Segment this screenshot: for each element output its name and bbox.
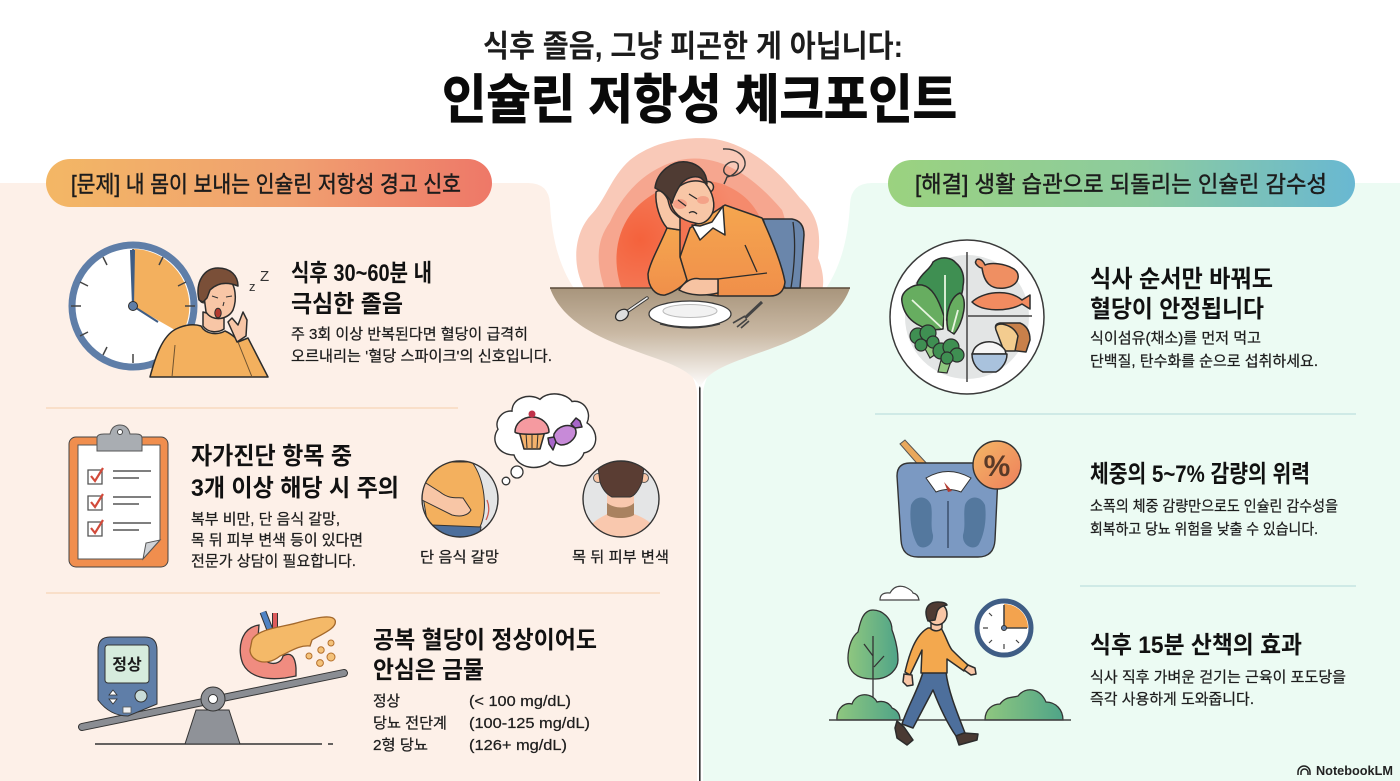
pancreas [240, 625, 296, 679]
title: 식후 졸음, 그냥 피곤한 게 아닙니다: [483, 29, 903, 64]
label: craving: 단 음식 갈망 [420, 549, 499, 566]
text: fasting glucose: 공복 혈당이 정상이어도 [373, 627, 597, 654]
NotebookLM watermark: NotebookLM [1316, 763, 1393, 778]
icon: glucose meter on seesaw with pancreas [82, 612, 344, 744]
icon: clipboard [69, 425, 168, 567]
heading pill: solution: [해결] 생활 습관으로 되돌리는 인슐린 감수성 [915, 171, 1327, 197]
solution 1: meal order [890, 240, 1318, 394]
text: weight loss: 체중의 5~7% 감량의 위력 [1090, 461, 1310, 488]
text: fasting glucose: 2형 당뇨 [373, 737, 428, 754]
text: self-check: 전문가 상담이 필요합니다. [191, 553, 356, 570]
icon: clock with yawning man: Z [260, 268, 269, 285]
heading pill: problem: [문제] 내 몸이 보내는 인슐린 저항성 경고 신호 [71, 171, 461, 197]
chair [763, 219, 804, 288]
heat aura [576, 138, 823, 290]
sweater [680, 205, 785, 296]
text: fasting glucose: (< 100 mg/dL) [469, 693, 571, 710]
text: fasting glucose: 당뇨 전단계 [373, 715, 447, 732]
text: drowsiness [291, 260, 552, 365]
icon: clock with yawning man [71, 245, 269, 377]
icon: walking man with clock and trees [829, 586, 1071, 745]
text: weight loss: 소폭의 체중 감량만으로도 인슐린 감수성을 [1090, 498, 1338, 515]
text: walking [1090, 632, 1346, 708]
icon: thought bubble with sweets [495, 394, 596, 485]
row 1: post-meal drowsiness [71, 245, 552, 377]
right panel background [703, 183, 1400, 781]
text: meal order: 단백질, 탄수화를 순으로 섭취하세요. [1090, 353, 1318, 370]
text: self-check: 목 뒤 피부 변색 등이 있다면 [191, 532, 363, 549]
icon: scale with percent badge: % [984, 450, 1010, 483]
heading pill: solution [888, 160, 1355, 207]
table [550, 288, 850, 388]
left panel background [0, 183, 697, 781]
plate [649, 301, 731, 328]
heading pill: problem [46, 159, 492, 207]
text: fasting glucose [373, 627, 597, 754]
icon: glucose meter on seesaw with pancreas: 정상 [112, 656, 142, 674]
ear [702, 182, 714, 192]
row 2: self-check [69, 394, 669, 570]
text: fasting glucose: 안심은 금물 [373, 657, 484, 684]
text: meal order: 식사 순서만 바꿔도 [1090, 266, 1273, 293]
text: self-check [191, 443, 399, 570]
text: walking: 즉각 사용하게 도와줍니다. [1090, 691, 1254, 708]
text: weight loss [1090, 461, 1338, 538]
text: meal order: 식이섬유(채소)를 먼저 먹고 [1090, 330, 1261, 347]
text: drowsiness: 식후 30~60분 내 [291, 260, 432, 287]
row 3: fasting glucose [82, 612, 597, 754]
text: fasting glucose: 정상 [373, 693, 400, 710]
text: walking: 식후 15분 산책의 효과 [1090, 632, 1302, 659]
dizzy spiral [723, 149, 745, 184]
icon: belly circle [418, 461, 498, 545]
icon: scale with percent badge [897, 440, 1021, 557]
title [442, 29, 957, 130]
solution 2: weight loss [897, 440, 1338, 557]
icon: divided plate [890, 240, 1044, 394]
face [670, 181, 714, 224]
text: drowsiness: 극심한 졸음 [291, 291, 403, 318]
text: meal order: 혈당이 안정됩니다 [1090, 296, 1264, 323]
text: fasting glucose: (126+ mg/dL) [469, 737, 567, 754]
text: self-check: 자가진단 항목 중 [191, 443, 352, 470]
center illustration: drowsy man at table [550, 138, 850, 388]
label: neck discoloration: 목 뒤 피부 변색 [572, 549, 669, 566]
text: self-check: 3개 이상 해당 시 주의 [191, 475, 399, 502]
collar [692, 206, 725, 240]
hair [655, 162, 707, 203]
text: weight loss: 회복하고 당뇨 위험을 낮출 수 있습니다. [1090, 521, 1318, 538]
text: meal order [1090, 266, 1318, 370]
icon: clock with yawning man: z [249, 279, 256, 294]
table hand [679, 279, 718, 295]
icon: neck circle [583, 460, 660, 537]
title: 인슐린 저항성 체크포인트 [442, 71, 957, 130]
fork [733, 302, 762, 328]
text: walking: 식사 직후 가벼운 걷기는 근육이 포도당을 [1090, 669, 1346, 686]
center divider line [699, 384, 701, 781]
spoon [613, 298, 647, 323]
hand on head [656, 191, 680, 230]
text: self-check: 복부 비만, 단 음식 갈망, [191, 511, 340, 528]
solution 3: walking [829, 586, 1346, 745]
text: drowsiness: 오르내리는 '혈당 스파이크'의 신호입니다. [291, 348, 552, 365]
text: fasting glucose: (100-125 mg/dL) [469, 715, 590, 732]
text: drowsiness: 주 3회 이상 반복된다면 혈당이 급격히 [291, 326, 528, 343]
